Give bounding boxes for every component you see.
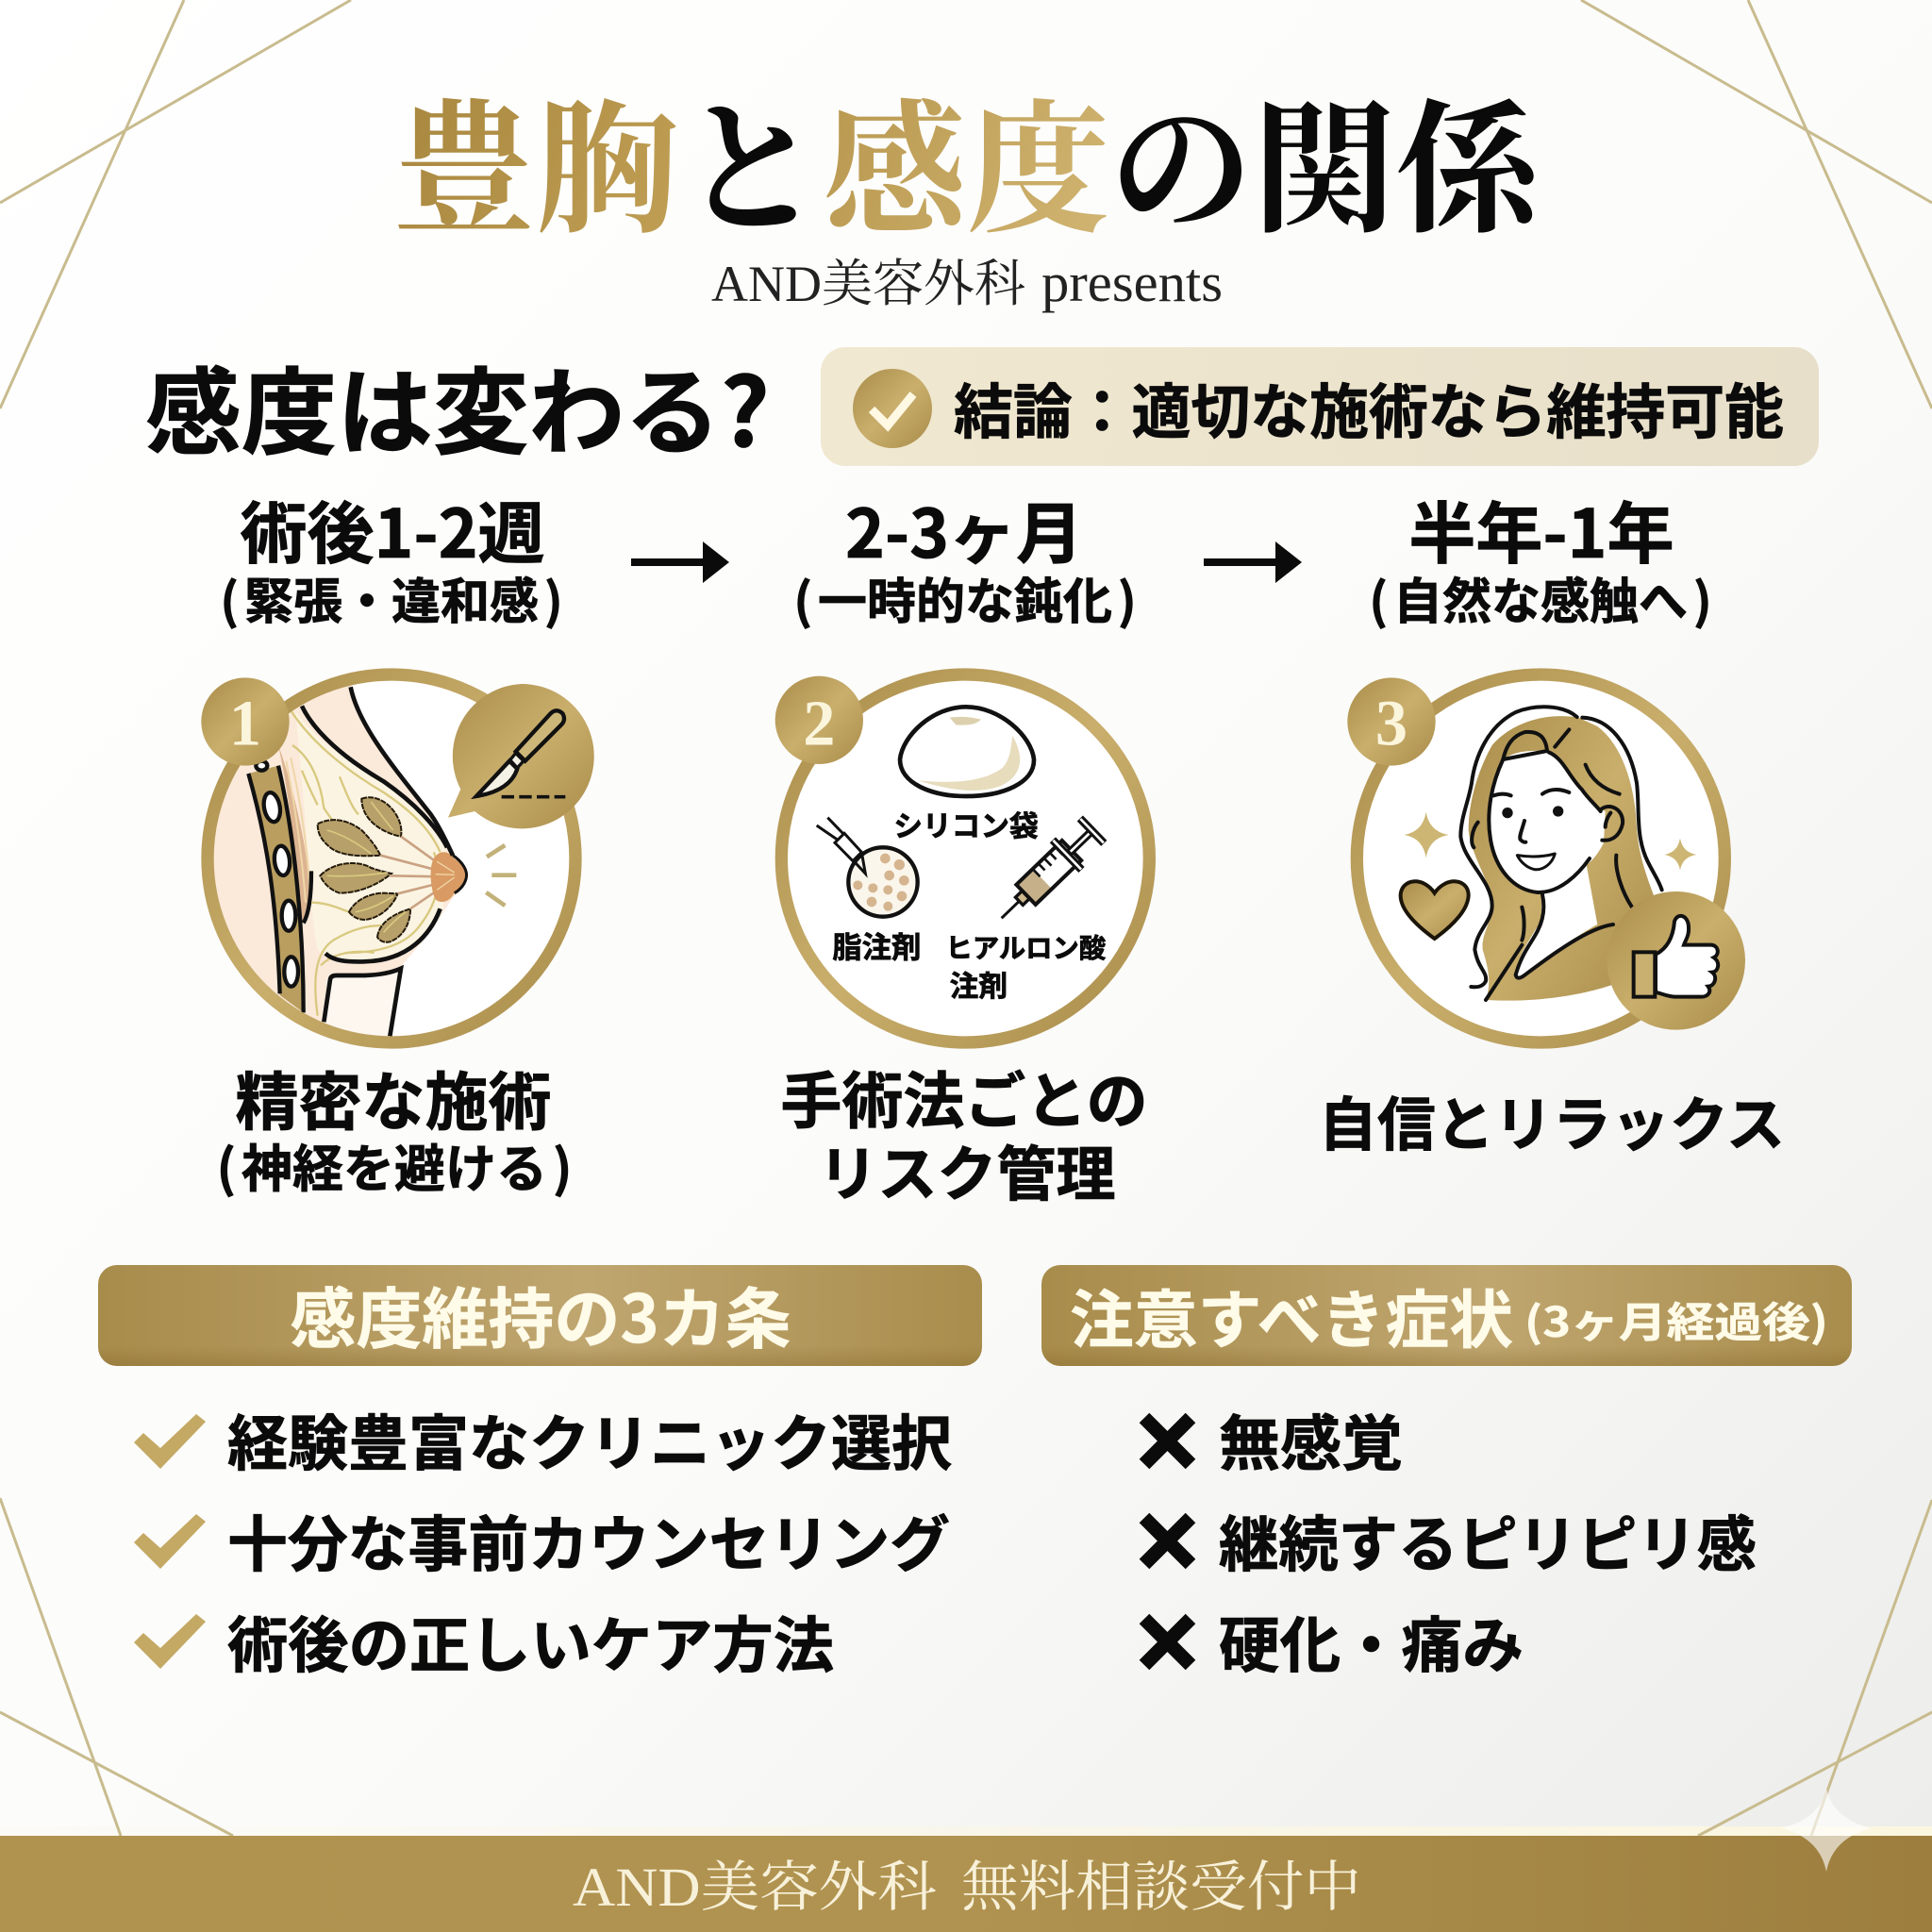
step: half year to 1 year <box>1369 481 1712 633</box>
icon: fat injection: 脂注剤 <box>832 924 921 967</box>
list item 2: 継続するピリピリ感 <box>1219 1497 1757 1584</box>
caption: precise procedure <box>217 1052 572 1202</box>
step: post-op 1-2 weeks <box>220 481 563 633</box>
icon: hyaluronic syringe: ヒアルロン酸 <box>945 927 1106 966</box>
step: 2-3 months: 2-3ヶ月 <box>845 481 1083 577</box>
list item 1: 無感覚 <box>1219 1396 1403 1483</box>
icon: hyaluronic syringe <box>945 815 1108 1005</box>
list item 2: 十分な事前カウンセリング <box>227 1497 950 1584</box>
heading bar: 注意すべき症状 <box>1070 1270 1513 1361</box>
heading bar <box>98 1265 982 1366</box>
subtitle <box>711 252 1223 313</box>
icon: thumbs up badge <box>1607 891 1745 1030</box>
badge: 3 <box>1347 677 1436 766</box>
icon: heart <box>1401 881 1469 939</box>
badge: 2: 2 <box>803 687 835 758</box>
icon: sparkles <box>1404 812 1696 871</box>
subtitle: presents <box>1041 252 1223 313</box>
caption: risk management: リスク管理 <box>819 1127 1115 1213</box>
icon: check circle <box>853 369 932 448</box>
step: half year to 1 year: (自然な感触へ) <box>1369 562 1712 633</box>
panel: warning symptoms <box>1041 1265 1852 1685</box>
footer band: 無料相談受付中 <box>961 1857 1361 1918</box>
step: post-op 1-2 weeks: (緊張・違和感) <box>220 562 563 633</box>
icon: fat injection <box>817 818 921 967</box>
caption: confidence and relax: 自信とリラックス <box>1319 1077 1785 1162</box>
arrow <box>1204 541 1302 583</box>
icon: hyaluronic syringe: 注剤 <box>950 962 1008 1005</box>
badge: 1 <box>201 677 290 766</box>
icon: scalpel bubble <box>448 684 594 828</box>
badge: 1: 1 <box>229 687 261 758</box>
panel: circle 2 surgical methods <box>775 675 1149 1042</box>
footer band <box>0 1836 1932 1932</box>
heading bar <box>1041 1265 1852 1366</box>
panel: three rules <box>98 1265 982 1685</box>
illustration: woman <box>1460 707 1662 1001</box>
badge: 3: 3 <box>1375 687 1407 758</box>
icon: corner sparkle <box>1781 1789 1872 1872</box>
step: 2-3 months: (一時的な鈍化) <box>793 562 1137 633</box>
title: 豊胸と感度の関係 <box>392 56 1548 261</box>
heading bar: 感度維持の3カ条 <box>290 1267 791 1362</box>
list item 3: 術後の正しいケア方法 <box>227 1598 834 1685</box>
caption: risk management <box>780 1052 1148 1213</box>
footer band: AND美容外科 <box>573 1857 937 1918</box>
badge: 2 <box>775 676 863 764</box>
step: half year to 1 year: 半年-1年 <box>1408 481 1674 577</box>
arrow <box>631 541 729 583</box>
icon: sensation rays <box>486 845 516 906</box>
timeline <box>220 481 1712 633</box>
heading bar: (3ヶ月経過後) <box>1524 1289 1828 1349</box>
subtitle: AND美容外科 <box>711 256 1025 312</box>
list item 3: 硬化・痛み <box>1219 1598 1524 1685</box>
panel: circle 3 confidence <box>1347 675 1745 1042</box>
conclusion text: 結論：適切な施術なら維持可能 <box>954 365 1784 451</box>
question heading: 感度は変わる? <box>145 337 770 474</box>
panel: conclusion <box>821 347 1819 466</box>
list item 1: 経験豊富なクリニック選択 <box>227 1396 952 1483</box>
caption: risk management: 手術法ごとの <box>780 1052 1148 1141</box>
icon: silicone implant <box>893 707 1039 845</box>
step: 2-3 months <box>793 481 1137 633</box>
panel: circle 1 precise procedure <box>201 675 594 1042</box>
caption: precise procedure: 精密な施術 <box>236 1052 551 1143</box>
icon: silicone implant: シリコン袋 <box>893 803 1039 845</box>
step: post-op 1-2 weeks: 術後1-2週 <box>240 481 545 577</box>
caption: precise procedure: (神経を避ける) <box>217 1127 572 1202</box>
